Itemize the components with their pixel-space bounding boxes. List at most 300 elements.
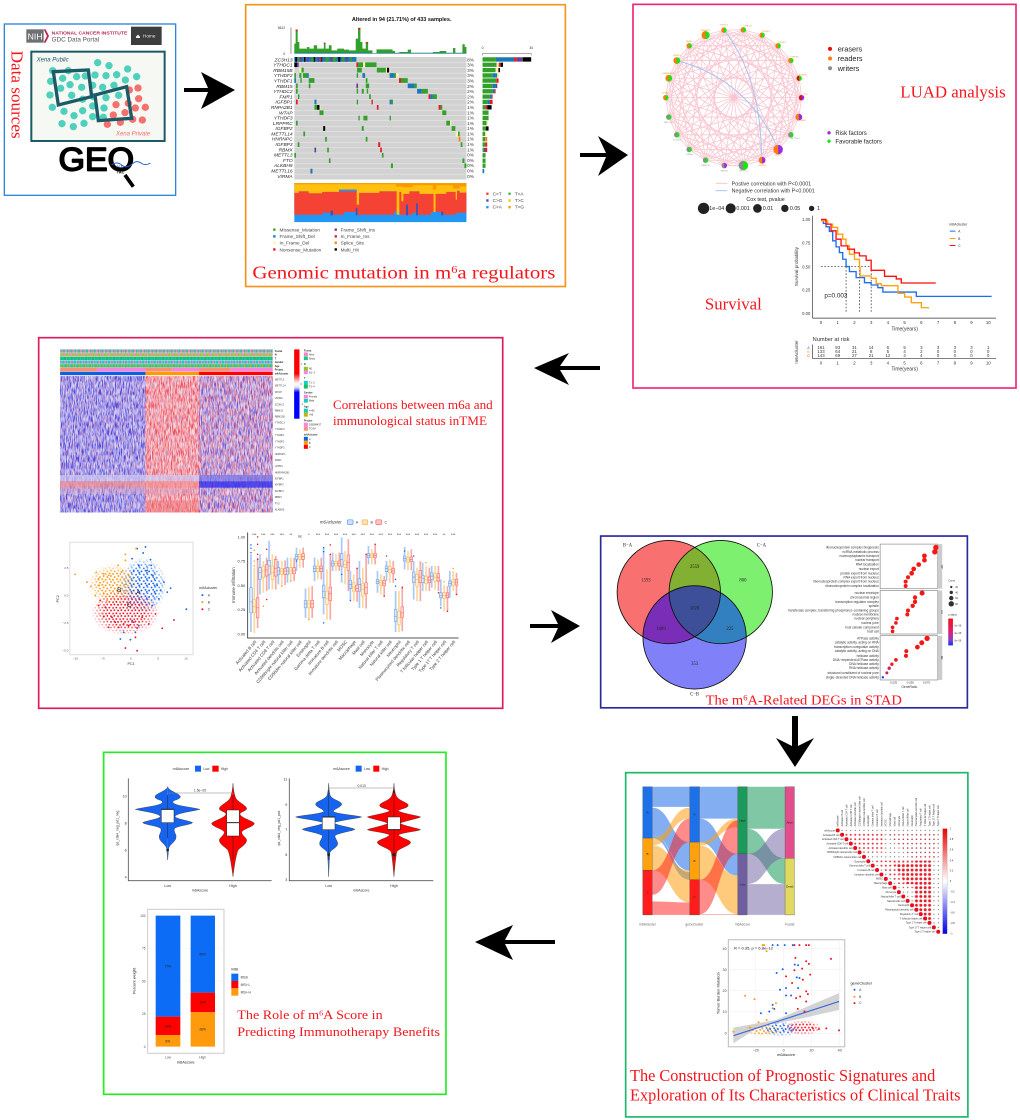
- GO enrichment dot plot: single−stranded DNA helicase activity: [826, 675, 879, 679]
- network node labels: YTHDF2: [778, 42, 787, 44]
- network node labels: IGFBP1: [774, 155, 783, 157]
- heading: correlations with immune status: Correlations between m6a and: [333, 398, 494, 412]
- gene labels: [271, 57, 293, 180]
- heatmap annotation legend: N1−3: [309, 372, 316, 375]
- network node labels: ZC3H13: [673, 139, 682, 141]
- Cox test legend: 0.001: [736, 206, 750, 212]
- GEO logo: GEO: [59, 141, 134, 178]
- panel: m6A-related DEGs: [601, 536, 967, 708]
- network node labels: ALKBH5: [798, 74, 808, 77]
- number at risk table: Time(years): [891, 367, 918, 373]
- immune infiltration box plot: Macrophage: [337, 639, 357, 661]
- correlation matrix: Mast cell: [882, 886, 892, 889]
- immune infiltration box plot: ***: [388, 533, 393, 537]
- Kaplan-Meier chart: 5: [903, 320, 906, 325]
- tumor burden scatter plot: 40: [838, 1048, 842, 1052]
- immune infiltration box plot: CD56bright natural killer cell: [255, 639, 294, 684]
- tumor burden scatter plot: [715, 940, 873, 1057]
- correlation matrix: Gamma delta T cell: [849, 865, 870, 868]
- correlation matrix: Activated CD8 T cell: [826, 842, 849, 845]
- percent labels: 3%: [467, 73, 474, 78]
- NIH GDC data portal logo: NIH: [28, 31, 43, 41]
- number at risk table: 31: [852, 345, 857, 350]
- percent labels: 0%: [467, 174, 474, 179]
- oncoplot title: Altered in 94 (21.71%) of 433 samples.: [352, 17, 452, 23]
- immune infiltration box plot: ***: [352, 533, 356, 537]
- violin plot: ips_ctla4_neg_pd1_neg: 6: [125, 848, 127, 852]
- GEO logo: ALK: [117, 164, 124, 168]
- immune infiltration box plot: *: [308, 533, 310, 537]
- panel frame: [104, 752, 446, 1094]
- number at risk table: A: [807, 346, 810, 350]
- correlation matrix: CD56bright natural killer cell: [859, 796, 862, 826]
- Kaplan-Meier chart: 1: [837, 320, 840, 325]
- violin plot: ips_ctla4_neg_pd1_pos: 11: [284, 778, 287, 782]
- arrow: TME panel to DEG panel: [530, 610, 580, 643]
- correlation matrix: [822, 796, 955, 935]
- PCA scatter plot: 5: [157, 657, 159, 661]
- immune infiltration box plot: Eosinophil: [295, 639, 312, 658]
- violin plot: ips_ctla4_neg_pd1_neg: 8: [125, 821, 127, 825]
- heatmap annotation legend: T1−2: [309, 382, 315, 385]
- heatmap row labels: FTO: [275, 502, 280, 505]
- number at risk table: 1: [837, 360, 840, 365]
- Kaplan-Meier chart: Time(years): [891, 326, 918, 332]
- annotation labels: Fustat: [275, 350, 282, 353]
- heatmap annotation legend: TCGA: [309, 428, 316, 431]
- network node labels: RBM15: [721, 170, 729, 172]
- variant classification legend: In_Frame_Del: [280, 241, 309, 246]
- heatmap row labels: ALKBH5: [275, 508, 285, 511]
- Kaplan-Meier chart: 0.50: [802, 264, 811, 269]
- violin plot: ips_ctla4_neg_pd1_neg: ips_ctla4_neg_pd1_neg: [115, 811, 119, 846]
- gene labels: RBM15: [276, 84, 293, 90]
- Cox test legend: 0.01: [763, 206, 773, 212]
- violin plot: ips_ctla4_neg_pd1_pos: m6Ascore: [353, 888, 370, 892]
- arrow: prognostic panel to immunotherapy panel: [475, 925, 555, 960]
- heatmap row labels: YTHDC1: [275, 422, 285, 425]
- number at risk table: 4: [903, 349, 906, 354]
- variant classification legend: Frame_Shift_Ins: [341, 227, 376, 232]
- right gene-level bar chart: 0: [482, 46, 484, 50]
- GO enrichment dot plot: [788, 544, 944, 689]
- correlation matrix: 0.4: [950, 859, 954, 862]
- immune infiltration box plot: 0.25: [237, 607, 246, 612]
- heatmap colour scale: [294, 349, 304, 419]
- GO enrichment dot plot: transferase complex, transferring phosphorus−containing groups: [788, 609, 879, 613]
- GO enrichment dot plot: nuclear export: [859, 567, 879, 571]
- correlation matrix: Immature dendritic cell: [854, 873, 879, 876]
- risk factor legend: Favorable factors: [835, 140, 882, 146]
- tumor burden scatter plot: 0: [783, 1048, 785, 1052]
- correlation matrix: Type 17 T helper cell: [933, 804, 936, 826]
- heatmap annotation legend: T3−4: [309, 386, 315, 389]
- Venn diagram: 1593: [641, 578, 651, 583]
- alluvial diagram: C: [693, 895, 696, 899]
- immune infiltration box plot: ***: [316, 533, 321, 537]
- heatmap annotation legend: Male: [309, 400, 315, 403]
- MSI stacked bar chart: m6Ascore: [177, 1060, 195, 1065]
- number at risk table: 2: [853, 360, 856, 365]
- MSI stacked bar chart: 75: [142, 947, 146, 951]
- number at risk table: 0: [937, 349, 940, 354]
- network node labels: RBMX: [686, 41, 693, 43]
- panel frame: [601, 536, 967, 708]
- regulator type legend: readers: [838, 54, 863, 63]
- immune infiltration box plot: ***: [343, 533, 348, 537]
- NIH GDC data portal logo: Home: [143, 33, 156, 38]
- correlation matrix: 1: [950, 828, 952, 831]
- correlation matrix: Immature B cell: [858, 869, 875, 872]
- immune infiltration box plot: [231, 519, 459, 684]
- heatmap row labels: RBM15B: [275, 416, 285, 419]
- panel frame: [246, 5, 565, 287]
- annotation labels: Gender: [275, 361, 283, 364]
- expression heatmap: [60, 376, 273, 512]
- alluvial diagram: A: [693, 812, 695, 816]
- MSI stacked bar chart: 25: [142, 1012, 146, 1016]
- variant classification legend: Splice_Site: [341, 241, 364, 246]
- GO enrichment dot plot: RNA localization: [856, 563, 879, 567]
- number at risk table: 0: [954, 353, 957, 358]
- oncoplot matrix: [294, 57, 466, 179]
- violin plot: ips_ctla4_neg_pd1_pos: High: [390, 884, 398, 888]
- heatmap row labels: IGFBP2: [275, 484, 284, 487]
- correlation matrix: Natural killer T cell: [881, 895, 901, 898]
- correlation matrix: Immature B cell: [876, 809, 879, 826]
- immune infiltration box plot: Immature dendritic cell: [307, 639, 339, 676]
- violin plot: ips_ctla4_neg_pd1_neg: High: [229, 884, 237, 888]
- violin plot: ips_ctla4_neg_pd1_pos: 9: [285, 803, 287, 807]
- right gene-level bar chart: 34: [529, 46, 533, 50]
- percent labels: 0%: [467, 158, 474, 163]
- immune infiltration box plot: ***: [406, 533, 411, 537]
- correlation matrix: m6Ascore: [837, 815, 840, 826]
- immune infiltration box plot: ns: [298, 535, 302, 539]
- number at risk table: 64: [835, 349, 841, 354]
- network node labels: YTHDC1: [720, 24, 729, 26]
- PCA scatter plot: B: [208, 601, 211, 605]
- number at risk table: 0: [970, 349, 973, 354]
- correlation matrix: Plasmacytoid dendritic cell: [885, 909, 914, 912]
- NIH GDC data portal logo: NATIONAL CANCER INSTITUTE: [52, 30, 128, 35]
- alluvial diagram: A: [646, 811, 648, 815]
- correlation matrix: Eosinophil: [854, 860, 866, 863]
- tumor burden scatter plot: Tumor Burden Mutation: [715, 972, 720, 1014]
- correlation matrix: CD56bright natural killer cell: [827, 851, 857, 854]
- annotation labels: Project: [275, 368, 283, 371]
- correlation matrix: Eosinophil: [867, 815, 870, 826]
- network nodes: [663, 27, 804, 170]
- heatmap row labels: [275, 379, 290, 511]
- correlation matrix: Activated B cell: [823, 834, 840, 837]
- correlation matrix: m6Ascore: [824, 829, 836, 832]
- PCA scatter plot: −10: [73, 657, 78, 661]
- regulator type legend: erasers: [838, 45, 863, 54]
- tumor burden scatter plot: m6Ascore: [777, 1052, 796, 1057]
- violin plot: ips_ctla4_neg_pd1_neg: m6Ascore: [192, 888, 208, 892]
- arrow: data sources to mutation panel: [184, 72, 235, 109]
- immune infiltration box plot: ***: [361, 533, 365, 537]
- correlation matrix: T follicular helper cell: [900, 917, 923, 920]
- correlation matrix: Natural killer T cell: [902, 806, 905, 826]
- correlation matrix: 0: [950, 880, 952, 883]
- alluvial diagram: [639, 787, 794, 926]
- immune infiltration box plot: m6Acluster: [320, 519, 342, 524]
- number at risk table: Number at risk: [813, 337, 850, 343]
- correlation matrix: Neutrophil: [911, 815, 914, 826]
- top mutation burden bars: [278, 26, 466, 56]
- gene labels: RNPA2B1: [271, 105, 293, 111]
- GO enrichment dot plot: nuclear transport: [855, 558, 879, 562]
- immune infiltration box plot: B: [370, 520, 373, 524]
- heatmap annotation legend: N0: [309, 367, 313, 370]
- GO enrichment dot plot: protein export from nucleus: [840, 571, 879, 575]
- network node labels: YTHDF3: [790, 57, 799, 59]
- heatmap annotation legend: C: [309, 446, 311, 449]
- gene labels: VIRMA: [277, 174, 293, 180]
- number at risk table: 143: [817, 353, 825, 358]
- MSI stacked bar chart: Percent weight: [132, 967, 137, 994]
- network node labels: [662, 24, 808, 173]
- violin plot: ips_ctla4_neg_pd1_pos: [277, 766, 433, 892]
- heatmap annotation legend: Fustat: [304, 349, 312, 352]
- number at risk table: 27: [852, 353, 857, 358]
- immune infiltration box plot: Natural killer T cell: [357, 639, 384, 670]
- tumor burden scatter plot: −20: [753, 1048, 759, 1052]
- correlation matrix: Natural killer cell: [887, 900, 905, 903]
- dot plot legend: 80: [955, 603, 959, 606]
- PCA scatter plot: PC2: [56, 595, 60, 602]
- heatmap annotation legend: Age: [304, 405, 309, 408]
- correlation matrix: −0.6: [950, 912, 955, 915]
- percent labels: 0%: [467, 163, 474, 168]
- heading: genomic mutation: Genomic mutation in m: [252, 262, 425, 282]
- percent labels: 1%: [467, 126, 474, 131]
- number at risk table: 0: [987, 353, 990, 358]
- Venn diagram: 2559: [690, 565, 700, 570]
- violin plot: ips_ctla4_neg_pd1_neg: 1.5e−05: [194, 788, 206, 792]
- gene labels: YTHDF3: [274, 115, 293, 121]
- tumor burden scatter plot: A: [859, 988, 862, 992]
- number at risk table: 6: [920, 360, 923, 365]
- number at risk table: 3: [954, 345, 957, 350]
- tumor burden scatter plot: geneCluster: [850, 981, 873, 986]
- violin plot: ips_ctla4_neg_pd1_pos: ips_ctla4_neg_pd1_pos: [277, 810, 281, 846]
- heading: Survival: Survival: [705, 294, 762, 313]
- dot plot legend: 60: [955, 597, 959, 600]
- percent labels: 1%: [467, 142, 474, 147]
- GO enrichment dot plot: host cell: [867, 629, 879, 633]
- immune infiltration box plot: Immune infiltration: [231, 567, 236, 603]
- network node labels: WTAP: [662, 91, 669, 94]
- correlation matrix: CD56dim natural killer cell: [833, 856, 862, 859]
- network node labels: METTL16: [664, 122, 674, 124]
- number at risk table: [794, 337, 996, 373]
- tumor burden scatter plot: B: [859, 995, 862, 999]
- immune infiltration box plot: Gamma delta T cell: [293, 639, 321, 671]
- MSI stacked bar chart: [132, 909, 252, 1065]
- PCA scatter plot: 10: [184, 657, 188, 661]
- number at risk table: m6Acluster: [794, 340, 799, 364]
- network node labels: YTHDF1: [762, 31, 771, 33]
- GO enrichment dot plot: MF: [940, 656, 944, 660]
- GO enrichment dot plot: transcription regulator complex: [835, 600, 879, 604]
- correlation matrix: Type 17 T helper cell: [909, 926, 931, 929]
- correlation matrix: −0.4: [950, 901, 955, 904]
- correlation legend: [716, 181, 815, 194]
- Kaplan-Meier chart: 9: [970, 320, 973, 325]
- MSI stacked bar chart: 59%: [199, 953, 206, 957]
- GO enrichment dot plot: ncRNA metabolic process: [842, 550, 879, 554]
- GO enrichment dot plot: 0.075: [923, 680, 930, 684]
- Cox test legend: Cox test, pvalue: [746, 197, 785, 203]
- heading: immunotherapy benefits: A Score in: [323, 1008, 383, 1022]
- violin plot: ips_ctla4_neg_pd1_pos: 7: [285, 828, 287, 832]
- gene labels: YTHDC1: [273, 62, 293, 68]
- correlation matrix: Gamma delta T cell: [872, 805, 875, 826]
- heatmap annotation legend: T: [304, 377, 306, 380]
- GO enrichment dot plot: ribonucleoprotein complex export from nucleus: [813, 580, 879, 584]
- dot plot legend: 2e−06: [954, 625, 962, 628]
- correlation matrix: Activated dendritic cell: [829, 847, 853, 850]
- base substitution legend: C>T: [493, 191, 502, 196]
- regulator type legend: [828, 45, 863, 73]
- panel: LUAD analysis: [633, 4, 1016, 388]
- number at risk table: 9: [970, 360, 973, 365]
- number at risk table: 10: [986, 360, 991, 365]
- immune infiltration box plot: A: [356, 520, 359, 524]
- number at risk table: 12: [885, 353, 891, 358]
- heatmap annotation legend: Female: [309, 396, 318, 399]
- Kaplan-Meier chart: 7: [937, 320, 940, 325]
- network node labels: VIRMA: [686, 153, 693, 156]
- number at risk table: 6: [887, 345, 890, 350]
- GO enrichment dot plot: GeneRatio: [901, 685, 917, 689]
- annotation labels: m6Acluster: [275, 373, 288, 376]
- tumor burden scatter plot: R = 0.35, p = 6.8e−12: [734, 945, 774, 950]
- number at risk table: 21: [869, 353, 874, 358]
- GO enrichment dot plot: structural constituent of nuclear pore: [827, 671, 879, 675]
- percent labels: [467, 57, 474, 179]
- gene labels: RBM15B: [273, 68, 293, 74]
- tumor burden scatter plot: 20: [809, 1048, 814, 1052]
- heatmap row labels: LPPRC: [275, 465, 283, 468]
- panel: genomic mutation: [246, 5, 565, 287]
- number at risk table: B: [807, 350, 810, 354]
- MSI stacked bar chart: 50: [142, 979, 146, 983]
- alluvial diagram: B: [693, 859, 695, 863]
- GO enrichment dot plot: 0.025: [890, 680, 898, 684]
- GO enrichment dot plot: nuclear membrane: [852, 613, 879, 617]
- immune infiltration box plot: Immature B cell: [307, 639, 330, 666]
- Venn diagram: 225: [726, 627, 734, 632]
- Kaplan-Meier chart: p=0.003: [824, 293, 848, 300]
- regulator type legend: writers: [837, 64, 860, 73]
- heading: LUAD analysis: LUAD analysis: [900, 83, 1006, 102]
- heatmap annotation legend: Gender: [304, 392, 313, 395]
- panel: prognostic signatures: [626, 773, 968, 1117]
- correlation matrix: Plasmacytoid dendritic cell: [915, 798, 918, 826]
- immune infiltration box plot: Monocyte: [359, 639, 375, 657]
- heatmap row labels: YTHDF3: [275, 446, 285, 449]
- percent labels: 1%: [467, 137, 474, 142]
- correlation matrix: Activated CD8 T cell: [850, 804, 853, 826]
- network node labels: HNRNPC: [701, 30, 711, 32]
- correlation matrix: Type 2 T helper cell: [937, 805, 940, 826]
- immune infiltration box plot: ***: [433, 533, 438, 537]
- correlation matrix: Type 1 T helper cell: [928, 805, 931, 826]
- right gene-level bar chart: [482, 46, 533, 171]
- correlation matrix: 0.8: [950, 838, 954, 841]
- immune infiltration box plot: Activated B cell: [234, 639, 257, 665]
- correlation matrix: Activated CD4 T cell: [845, 804, 848, 826]
- Kaplan-Meier chart: B: [958, 237, 961, 241]
- correlation matrix: Regulatory T cell: [920, 808, 923, 826]
- base substitution legend: C>G: [493, 198, 503, 203]
- percent labels: 1%: [467, 115, 474, 120]
- Xena public/private diagram: Xena Private: [115, 131, 151, 137]
- percent labels: 2%: [467, 100, 474, 105]
- risk factor legend: Risk factors: [835, 131, 867, 137]
- violin plot: ips_ctla4_neg_pd1_neg: [115, 766, 272, 892]
- gene labels: IGFBP1: [275, 100, 293, 106]
- Kaplan-Meier chart: C: [958, 244, 961, 248]
- MSI stacked bar chart: 26%: [199, 1028, 206, 1032]
- percent labels: 2%: [467, 94, 474, 99]
- immune infiltration box plot: ***: [379, 533, 384, 537]
- immune infiltration box plot: ***: [280, 533, 284, 537]
- panel: immunotherapy benefits: [104, 752, 446, 1094]
- arrow: DEG panel to prognostic signature panel: [776, 716, 814, 767]
- GO enrichment dot plot: catalytic activity, acting on RNA: [835, 641, 880, 645]
- Cox test legend: [698, 197, 820, 214]
- GO enrichment dot plot: nucleocytoplasmic transport: [839, 554, 879, 558]
- immune infiltration box plot: ***: [451, 533, 456, 537]
- Venn diagram: [617, 540, 772, 697]
- violin plot: ips_ctla4_neg_pd1_pos: m6Ascore: [333, 767, 350, 771]
- number at risk table: 4: [887, 360, 890, 365]
- percent labels: 1%: [467, 121, 474, 126]
- Venn diagram: 1028: [690, 607, 700, 612]
- Kaplan-Meier chart: Survival probability: [794, 246, 799, 286]
- correlation matrix: Type 1 T helper cell: [906, 922, 927, 925]
- variant classification legend: Frame_Shift_Del: [280, 234, 315, 239]
- gene labels: ZC3H13: [274, 57, 293, 63]
- correlation matrix: MDSC: [876, 878, 883, 881]
- immune infiltration box plot: Mast cell: [351, 639, 366, 656]
- network node labels: IGFBP3: [673, 55, 681, 57]
- correlation matrix: Activated B cell: [841, 809, 844, 826]
- GO enrichment dot plot: ATPase activity: [857, 636, 879, 640]
- immune infiltration box plot: MDSC: [336, 639, 348, 652]
- gene labels: HNRNPC: [272, 137, 293, 143]
- violin plot: ips_ctla4_neg_pd1_pos: High: [382, 767, 389, 771]
- GO enrichment dot plot: nuclear envelope: [855, 591, 879, 595]
- top mutation burden bars: 0: [283, 52, 285, 56]
- correlation matrix: Activated CD4 T cell: [822, 838, 844, 841]
- annotation labels: N: [275, 354, 277, 357]
- Cox test legend: 1: [817, 206, 820, 212]
- arrow: mutation panel to LUAD panel: [580, 136, 628, 176]
- GO enrichment dot plot: helicase activity: [857, 654, 879, 658]
- heatmap row labels: WTAP: [275, 391, 282, 394]
- PCA scatter plot: 2.5: [64, 566, 69, 570]
- network node labels: FTO: [803, 94, 808, 96]
- gene labels: IGFBP3: [275, 142, 293, 148]
- heatmap row labels: HNRNPA2B1: [275, 471, 290, 474]
- GO enrichment dot plot: chromosomal region: [850, 595, 879, 599]
